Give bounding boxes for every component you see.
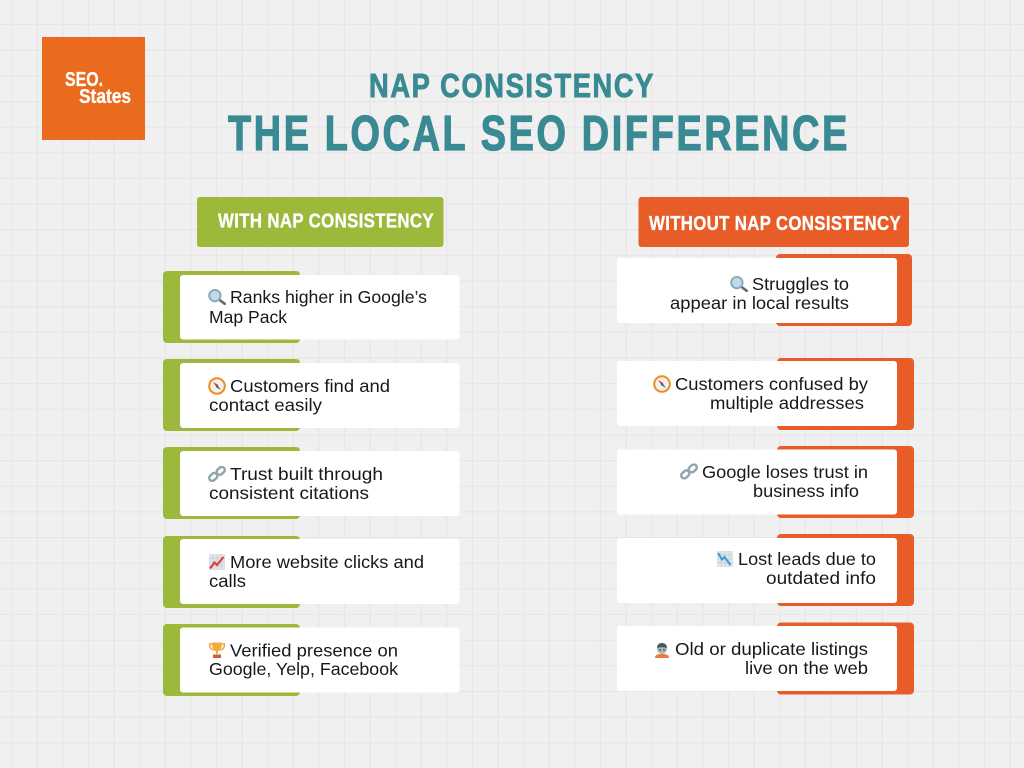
card: lost leads: Lost leads due to: [738, 549, 876, 569]
logo: SEO.States: States: [79, 86, 131, 108]
logo: SEO.States: SEO.: [65, 69, 103, 91]
card: google loses trust: [617, 446, 914, 518]
heading: without NAP consistency: [638, 197, 909, 247]
card: struggles to appear: [617, 254, 912, 326]
panel: with NAP consistency: [163, 197, 460, 696]
card: verified presence: [163, 624, 460, 696]
heading: with NAP consistency: [197, 197, 444, 247]
card: ranks higher: Map Pack: [209, 307, 287, 327]
card: customers confused: Customers confused by: [675, 374, 868, 394]
title: NAP CONSISTENCY: [369, 68, 655, 105]
card: trust built: consistent citations: [209, 483, 369, 503]
card: more clicks: calls: [209, 571, 246, 591]
card: lost leads: [617, 534, 914, 606]
card: more clicks: More website clicks and: [230, 552, 424, 572]
card: verified presence: Google, Yelp, Facebook: [209, 659, 398, 679]
card: google loses trust: business info: [753, 481, 859, 501]
title: THE LOCAL SEO DIFFERENCE: [228, 106, 850, 161]
card: customers find: Customers find and: [230, 376, 390, 396]
card: customers find: contact easily: [209, 395, 322, 415]
card: ranks higher: Ranks higher in Google’s: [230, 287, 427, 307]
card: google loses trust: Google loses trust in: [702, 462, 868, 482]
card: lost leads: outdated info: [766, 568, 876, 588]
heading: without NAP consistency: WITHOUT NAP CONSISTENCY: [649, 213, 901, 235]
card: more clicks: [163, 536, 460, 608]
card: customers confused: multiple addresses: [710, 393, 864, 413]
panel: without NAP consistency: [617, 197, 914, 694]
card: old or duplicate listings: live on the web: [745, 658, 868, 678]
card: trust built: [163, 447, 460, 519]
card: old or duplicate listings: [617, 622, 914, 694]
card: customers find: [163, 359, 460, 431]
heading: with NAP consistency: WITH NAP CONSISTENCY: [218, 210, 434, 232]
title: [228, 68, 850, 161]
card: customers confused: [617, 358, 914, 430]
logo: SEO.States: [42, 37, 145, 140]
card: struggles to appear: appear in local results: [670, 293, 849, 313]
card: verified presence: Verified presence on: [230, 640, 398, 660]
card: old or duplicate listings: Old or duplicate listings: [675, 639, 868, 659]
card: ranks higher: [163, 271, 460, 343]
card: struggles to appear: Struggles to: [752, 274, 849, 294]
card: trust built: Trust built through: [230, 464, 383, 484]
